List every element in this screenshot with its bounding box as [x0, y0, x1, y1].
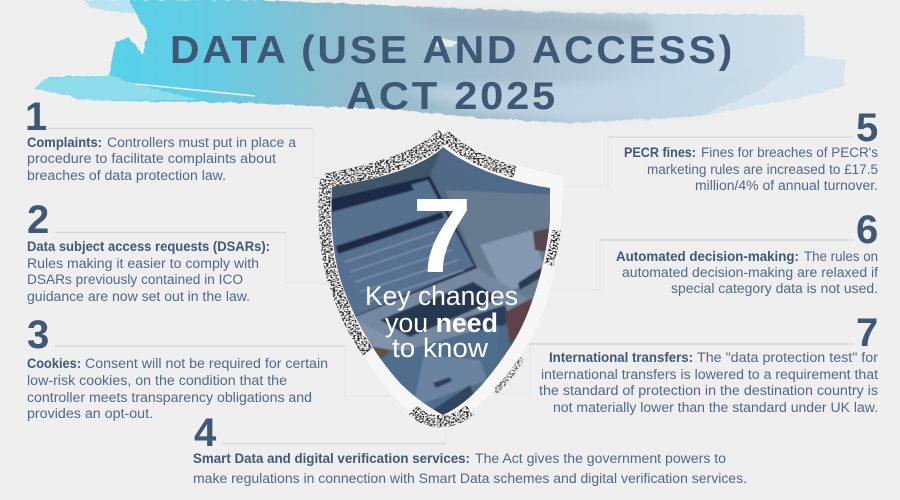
- item 2: DSARs: Rules making it easier to comply with: [27, 256, 259, 271]
- shield caption: to know: [392, 333, 489, 363]
- item 2: DSARs: Data subject access requests (DSARs):: [27, 239, 270, 254]
- item 3: cookies: provides an opt-out.: [27, 406, 153, 421]
- item 1: complaints: [25, 95, 297, 183]
- item 6: automated decision-making: automated decision-making are relaxed if: [622, 265, 878, 280]
- item 1: complaints: 1: [25, 95, 47, 139]
- shield caption: Key changes: [365, 281, 518, 311]
- item 7: international transfers: 7: [856, 311, 878, 355]
- title: [170, 29, 735, 118]
- item 7: international transfers: International transfers:: [549, 350, 693, 365]
- item 5: PECR fines: 5: [856, 106, 878, 150]
- shield caption: [365, 281, 518, 363]
- title: DATA (USE AND ACCESS): [170, 29, 735, 72]
- item 1: complaints: breaches of data protection law.: [27, 168, 226, 183]
- item 7: international transfers: international transfers is lowered to a requirement that: [541, 367, 878, 382]
- watercolour brush banner: [34, 0, 846, 123]
- item 4: smart data: The Act gives the government powers to: [475, 451, 726, 466]
- item 3: cookies: Consent will not be required for certain: [85, 356, 328, 371]
- item 6: automated decision-making: special category data is not used.: [671, 281, 878, 296]
- item 7: international transfers: not materially lower than the standard under UK law.: [553, 400, 878, 415]
- item 3: cookies: 3: [27, 313, 49, 357]
- item 2: DSARs: DSARs previously contained in ICO: [27, 272, 243, 287]
- item 5: PECR fines: Fines for breaches of PECR's: [701, 145, 878, 160]
- item 5: PECR fines: marketing rules are increased to £17.5: [647, 162, 878, 177]
- shield grain: [324, 135, 556, 421]
- item 1: complaints: Controllers must put in place a: [107, 135, 297, 150]
- item 1: complaints: Complaints:: [27, 135, 102, 150]
- item 1: complaints: procedure to facilitate complaints about: [27, 151, 276, 166]
- item 3: cookies: low-risk cookies, on the condition that the: [27, 373, 287, 388]
- item 6: automated decision-making: 6: [856, 208, 878, 252]
- shield: [318, 128, 563, 430]
- item 4: smart data: make regulations in connection with Smart Data schemes and digital verification services.: [193, 471, 747, 486]
- item 2: DSARs: 2: [27, 198, 49, 242]
- item 7: international transfers: the standard of protection in the destination country is: [539, 383, 878, 398]
- item 7: international transfers: [539, 311, 879, 415]
- item 6: automated decision-making: The rules on: [804, 249, 878, 264]
- item 4: smart data: Smart Data and digital verification services:: [193, 451, 470, 466]
- item 3: cookies: [27, 313, 328, 421]
- item 5: PECR fines: PECR fines:: [624, 145, 696, 160]
- item 2: DSARs: [27, 198, 270, 304]
- item 5: PECR fines: million/4% of annual turnover.: [695, 178, 878, 193]
- item 4: smart data: [193, 411, 747, 486]
- item 6: automated decision-making: [616, 208, 878, 296]
- item 7: international transfers: The "data protection test" for: [697, 350, 879, 365]
- shield number: 7: [413, 177, 471, 295]
- shield outer border: [318, 128, 563, 430]
- title: ACT 2025: [346, 75, 558, 118]
- item 5: PECR fines: [624, 106, 878, 193]
- item 3: cookies: Cookies:: [27, 356, 81, 371]
- shield photo: laptop: [332, 147, 550, 415]
- item 2: DSARs: guidance are now set out in the law.: [27, 289, 250, 304]
- shield caption: you need: [385, 308, 498, 338]
- item 3: cookies: controller meets transparency obligations and: [27, 390, 312, 405]
- item 6: automated decision-making: Automated decision-making:: [616, 249, 799, 264]
- item 4: smart data: 4: [194, 411, 217, 455]
- connector lines: [48, 128, 853, 444]
